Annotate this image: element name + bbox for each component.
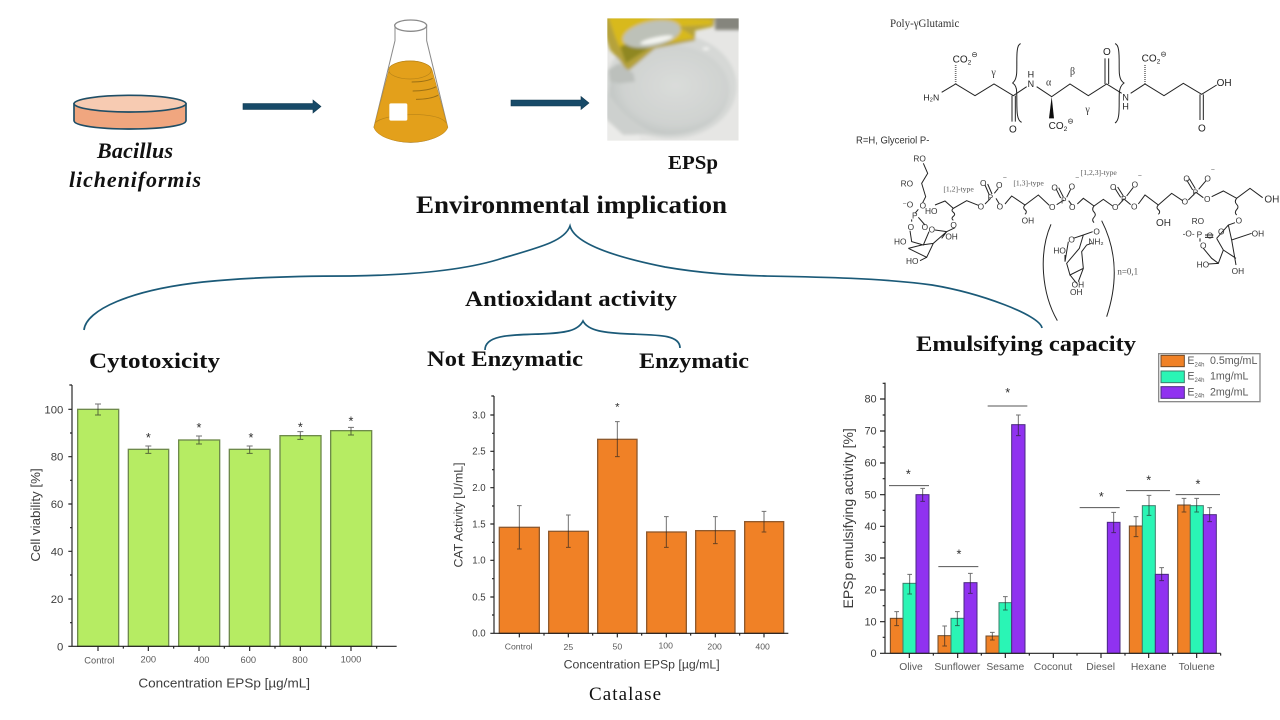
chemical structure: lipoteichoic acid: O: [1236, 215, 1243, 225]
chemical structure: lipoteichoic acid: O: [1182, 197, 1189, 207]
caption: Catalase: Catalase: [589, 684, 661, 705]
chemical structure: lipoteichoic acid: O: [1069, 181, 1076, 191]
chemical structure: lipoteichoic acid: n=0,1: [1117, 266, 1138, 276]
chemical structure: lipoteichoic acid: O: [1183, 173, 1190, 183]
error bars: [517, 422, 766, 549]
chemical structure: poly-gamma glutamic: O: [1009, 124, 1017, 135]
legend: 1mg/mL: [1210, 371, 1249, 383]
y tick labels: 2.0: [472, 483, 486, 494]
y tick labels: 0.5: [472, 592, 486, 603]
category labels: 1000: [341, 654, 361, 664]
y tick labels: 30: [864, 553, 877, 565]
category labels: 800: [292, 655, 308, 665]
icon: petri dish: [74, 95, 186, 129]
axes: [68, 385, 397, 651]
y tick labels: 20: [51, 594, 63, 606]
error bars: [95, 404, 354, 453]
chemical structure: lipoteichoic acid: O: [1049, 202, 1056, 212]
y axis title: CAT Activity [U/mL]: [451, 462, 465, 568]
legend: 24h: [1194, 394, 1204, 400]
chemical structure: lipoteichoic acid: P: [1193, 187, 1199, 197]
chemical structure: lipoteichoic acid: ⁻: [1138, 172, 1142, 182]
chemical structure: lipoteichoic acid: OH: [1072, 279, 1084, 289]
chemical structure: lipoteichoic acid: ⁻O: [902, 199, 914, 209]
category labels: Coconut: [1034, 662, 1072, 673]
chemical structure: lipoteichoic acid: O: [1204, 173, 1211, 183]
chemical structure: poly-gamma glutamic: γ: [1084, 104, 1090, 115]
chemical structure: lipoteichoic acid: OH: [945, 231, 958, 241]
significance stars: *: [957, 548, 962, 562]
category labels: Sesame: [986, 662, 1025, 673]
y tick labels: [472, 410, 486, 640]
chemical structure: lipoteichoic acid: O: [1112, 202, 1119, 212]
y tick labels: 40: [51, 546, 63, 558]
chemical structure: lipoteichoic acid: O: [908, 222, 915, 232]
chemical structure: lipoteichoic acid: O: [1068, 235, 1075, 245]
chemical structure: poly-gamma glutamic: ⊖: [971, 50, 977, 59]
chemical structure: poly-gamma glutamic: H: [1028, 70, 1034, 80]
chemical structure: lipoteichoic acid: RO: [901, 179, 914, 189]
chemical structure: lipoteichoic acid: O: [1110, 182, 1117, 192]
category labels: Control: [84, 656, 114, 666]
chemical structure: lipoteichoic acid: P: [988, 193, 994, 203]
chemical structure: poly-gamma glutamic: H₂N: [923, 92, 939, 102]
significance stars: *: [197, 421, 202, 435]
chemical structure: lipoteichoic acid: OH: [1070, 287, 1082, 297]
legend: E: [1187, 386, 1194, 398]
chemical structure: lipoteichoic acid: HO: [925, 206, 938, 216]
category labels: 400: [755, 641, 770, 651]
icon: flask: [374, 20, 448, 142]
y tick labels: 50: [864, 489, 877, 501]
chemical structure: lipoteichoic acid: ⁻: [1075, 174, 1079, 184]
category labels: Sunflower: [934, 662, 981, 673]
chemical structure: poly-gamma glutamic: CO: [953, 54, 968, 65]
error bars: [894, 415, 1212, 646]
y tick labels: 0: [871, 648, 877, 660]
significance star: *: [615, 401, 620, 413]
bracket: antioxidant activity: [485, 321, 680, 350]
category labels: [899, 662, 1215, 673]
chemical structure: lipoteichoic acid: P: [912, 210, 918, 220]
legend: E: [1187, 355, 1194, 367]
arrow: flask to EPSp: [511, 96, 589, 110]
significance stars: [906, 386, 1201, 562]
chemical structure: poly-gamma glutamic: Poly-γGlutamic: [890, 18, 959, 30]
bar chart: emulsifying activity: [840, 383, 1221, 673]
chemical structure: lipoteichoic acid: OH: [1232, 266, 1244, 276]
chemical structure: poly-gamma glutamic: OH: [1217, 78, 1232, 89]
chemical structure: lipoteichoic acid: O: [1207, 230, 1214, 240]
chemical structure: poly-gamma glutamic: CO: [1049, 121, 1064, 132]
significance stars: *: [1099, 490, 1104, 504]
y tick labels: 80: [864, 394, 877, 406]
chemical structure: lipoteichoic acid: O: [920, 201, 927, 211]
chemical structure: lipoteichoic acid: [1,2]-type: [943, 185, 974, 194]
chemical structure: lipoteichoic acid: RO: [913, 153, 926, 163]
bar chart: cell viability: [28, 385, 397, 690]
chemical structure: poly-gamma glutamic: [890, 18, 1232, 135]
chemical structure: poly-gamma glutamic: β: [1070, 66, 1075, 77]
chemical structure: lipoteichoic acid: O: [1131, 201, 1138, 211]
chemical structure: lipoteichoic acid: NH₂: [1088, 237, 1104, 247]
legend: E: [1187, 371, 1194, 383]
heading: Not Enzymatic: Not Enzymatic: [427, 346, 583, 371]
chemical structure: lipoteichoic acid: P: [1197, 229, 1203, 239]
y tick labels: 60: [864, 458, 877, 470]
legend: 2mg/mL: [1210, 386, 1249, 398]
label: Bacillus licheniformis: [69, 138, 201, 192]
y tick labels: 80: [51, 452, 63, 464]
chemical structure: lipoteichoic acid: O: [1218, 227, 1225, 237]
bar chart: catalase activity: [451, 396, 788, 671]
teal bars: [903, 506, 1203, 653]
chemical structure: lipoteichoic acid: P: [1121, 194, 1127, 204]
significance stars: *: [298, 420, 303, 434]
chemical structure: lipoteichoic acid: RO: [1192, 216, 1205, 226]
label: EPSp: EPSp: [668, 152, 718, 174]
significance stars: *: [1005, 386, 1010, 400]
chemical structure: lipoteichoic acid: O: [997, 201, 1004, 211]
category labels: Control: [505, 641, 533, 651]
significance stars: [146, 414, 354, 445]
chemical structure: lipoteichoic acid: ⁻: [1003, 174, 1007, 184]
chemical structure: lipoteichoic acid: O: [996, 180, 1003, 190]
legend: 24h: [1194, 362, 1204, 368]
y tick labels: 70: [864, 426, 877, 438]
chemical structure: poly-gamma glutamic: 2: [968, 59, 972, 66]
category labels: 25: [564, 642, 573, 652]
chemical structure: lipoteichoic acid: HO: [894, 237, 907, 247]
chemical structure: poly-gamma glutamic: 2: [1157, 59, 1161, 66]
heading: Cytotoxicity: Cytotoxicity: [89, 348, 220, 373]
x axis title: Concentration EPSp [µg/mL]: [564, 657, 720, 671]
y tick labels: [44, 404, 63, 653]
chemical structure: lipoteichoic acid: O: [1093, 226, 1100, 236]
significance stars: *: [249, 431, 254, 445]
arrow: dish to flask: [243, 100, 321, 113]
chemical structure: lipoteichoic acid: -O-: [1183, 229, 1195, 239]
y tick labels: 20: [864, 585, 877, 597]
category labels: 200: [141, 654, 156, 664]
chemical structure: poly-gamma glutamic: CO: [1142, 54, 1157, 65]
y tick labels: 2.5: [472, 447, 486, 458]
chemical structure: lipoteichoic acid: O: [1132, 180, 1139, 190]
significance stars: *: [1196, 478, 1201, 492]
heading: Environmental implication: Environmental implication: [416, 192, 727, 219]
category labels: 50: [613, 641, 622, 651]
chemical structure: poly-gamma glutamic: N: [1028, 79, 1034, 89]
bars: [499, 439, 784, 633]
chemical structure: lipoteichoic acid: [1,3]-type: [1013, 179, 1044, 188]
y tick labels: 1.5: [472, 519, 486, 530]
chemical structure: lipoteichoic acid: HO: [1197, 259, 1210, 269]
chemical structure: poly-gamma glutamic: γ: [990, 68, 996, 79]
significance stars: *: [906, 468, 911, 482]
purple bars: [916, 425, 1216, 653]
category labels: 100: [658, 641, 673, 651]
chemical structure: lipoteichoic acid: R=H, Glyceriol P-: [856, 136, 929, 147]
chemical structure: lipoteichoic acid: ⁻: [1211, 166, 1215, 176]
legend: [1159, 354, 1260, 402]
bars: [78, 409, 372, 646]
chemical structure: poly-gamma glutamic: ⊖: [1160, 49, 1166, 58]
y tick labels: 40: [864, 521, 877, 533]
category labels: 200: [707, 641, 722, 651]
chemical structure: lipoteichoic acid: O: [980, 178, 987, 188]
label: Bacillus licheniformis: licheniformis: [69, 167, 201, 192]
axes: [490, 396, 788, 637]
significance stars: *: [146, 431, 151, 445]
chemical structure: poly-gamma glutamic: N: [1122, 92, 1129, 102]
legend: 24h: [1194, 378, 1204, 384]
chemical structure: lipoteichoic acid: O: [929, 225, 936, 235]
chemical structure: lipoteichoic acid: O: [978, 201, 985, 211]
chemical structure: lipoteichoic acid: [1,2,3]-type: [1081, 168, 1117, 177]
chemical structure: lipoteichoic acid: HO: [1053, 245, 1066, 255]
chemical structure: lipoteichoic acid: O: [1200, 240, 1207, 250]
y tick labels: 100: [44, 404, 63, 416]
chemical structure: lipoteichoic acid: O: [1204, 194, 1211, 204]
y tick labels: 10: [864, 616, 877, 628]
category labels: 400: [194, 655, 209, 665]
category labels: Hexane: [1131, 662, 1167, 673]
chemical structure: lipoteichoic acid: O: [1051, 183, 1058, 193]
heading: Antioxidant activity: Antioxidant activity: [465, 286, 677, 311]
y tick labels: 1.0: [472, 556, 486, 567]
significance stars: *: [349, 414, 354, 428]
chemical structure: lipoteichoic acid: P: [1061, 195, 1067, 205]
chemical structure: poly-gamma glutamic: 2: [1064, 126, 1068, 133]
chemical structure: lipoteichoic acid: HO: [906, 256, 919, 266]
chemical structure: poly-gamma glutamic: ⊖: [1067, 117, 1073, 126]
chemical structure: lipoteichoic acid: O: [950, 220, 957, 230]
y tick labels: 0: [57, 641, 63, 653]
chemical structure: poly-gamma glutamic: H: [1122, 101, 1129, 111]
chemical structure: poly-gamma glutamic: O: [1103, 47, 1111, 58]
chemical structure: lipoteichoic acid: OH: [1264, 195, 1279, 206]
chemical structure: lipoteichoic acid: [856, 136, 1279, 321]
category labels: [505, 641, 770, 652]
chemical structure: lipoteichoic acid: OH: [1156, 218, 1171, 229]
y tick labels: 0.0: [472, 629, 486, 640]
heading: Enzymatic: Enzymatic: [639, 348, 749, 373]
category labels: Diesel: [1086, 662, 1115, 673]
chemical structure: lipoteichoic acid: O: [922, 222, 929, 232]
legend: 0.5mg/mL: [1210, 355, 1257, 367]
significance stars: *: [1146, 474, 1151, 488]
chemical structure: poly-gamma glutamic: O: [1198, 123, 1206, 134]
bracket: environmental implication: [84, 226, 1042, 330]
significance lines: [889, 406, 1220, 567]
orange bars: [890, 505, 1190, 653]
axes: [880, 383, 1221, 658]
photo: EPSp in petri dish: [603, 15, 743, 147]
category labels: Olive: [899, 662, 923, 673]
y tick labels: [864, 394, 877, 660]
label: Bacillus licheniformis: Bacillus: [96, 138, 173, 163]
y axis title: Cell viability [%]: [28, 468, 43, 562]
category labels: [84, 654, 361, 666]
category labels: 600: [241, 655, 256, 665]
chemical structure: lipoteichoic acid: OH: [1022, 216, 1034, 226]
x axis title: Concentration EPSp [µg/mL]: [138, 675, 310, 690]
y tick labels: 60: [51, 499, 63, 511]
chemical structure: poly-gamma glutamic: α: [1046, 77, 1051, 88]
chemical structure: lipoteichoic acid: O: [1069, 202, 1076, 212]
y axis title: EPSp emulsifying activity [%]: [840, 428, 856, 608]
y tick labels: 3.0: [472, 410, 486, 421]
heading: Emulsifying capacity: Emulsifying capacity: [916, 331, 1136, 356]
category labels: Toluene: [1179, 662, 1215, 673]
chemical structure: lipoteichoic acid: OH: [1252, 229, 1264, 239]
